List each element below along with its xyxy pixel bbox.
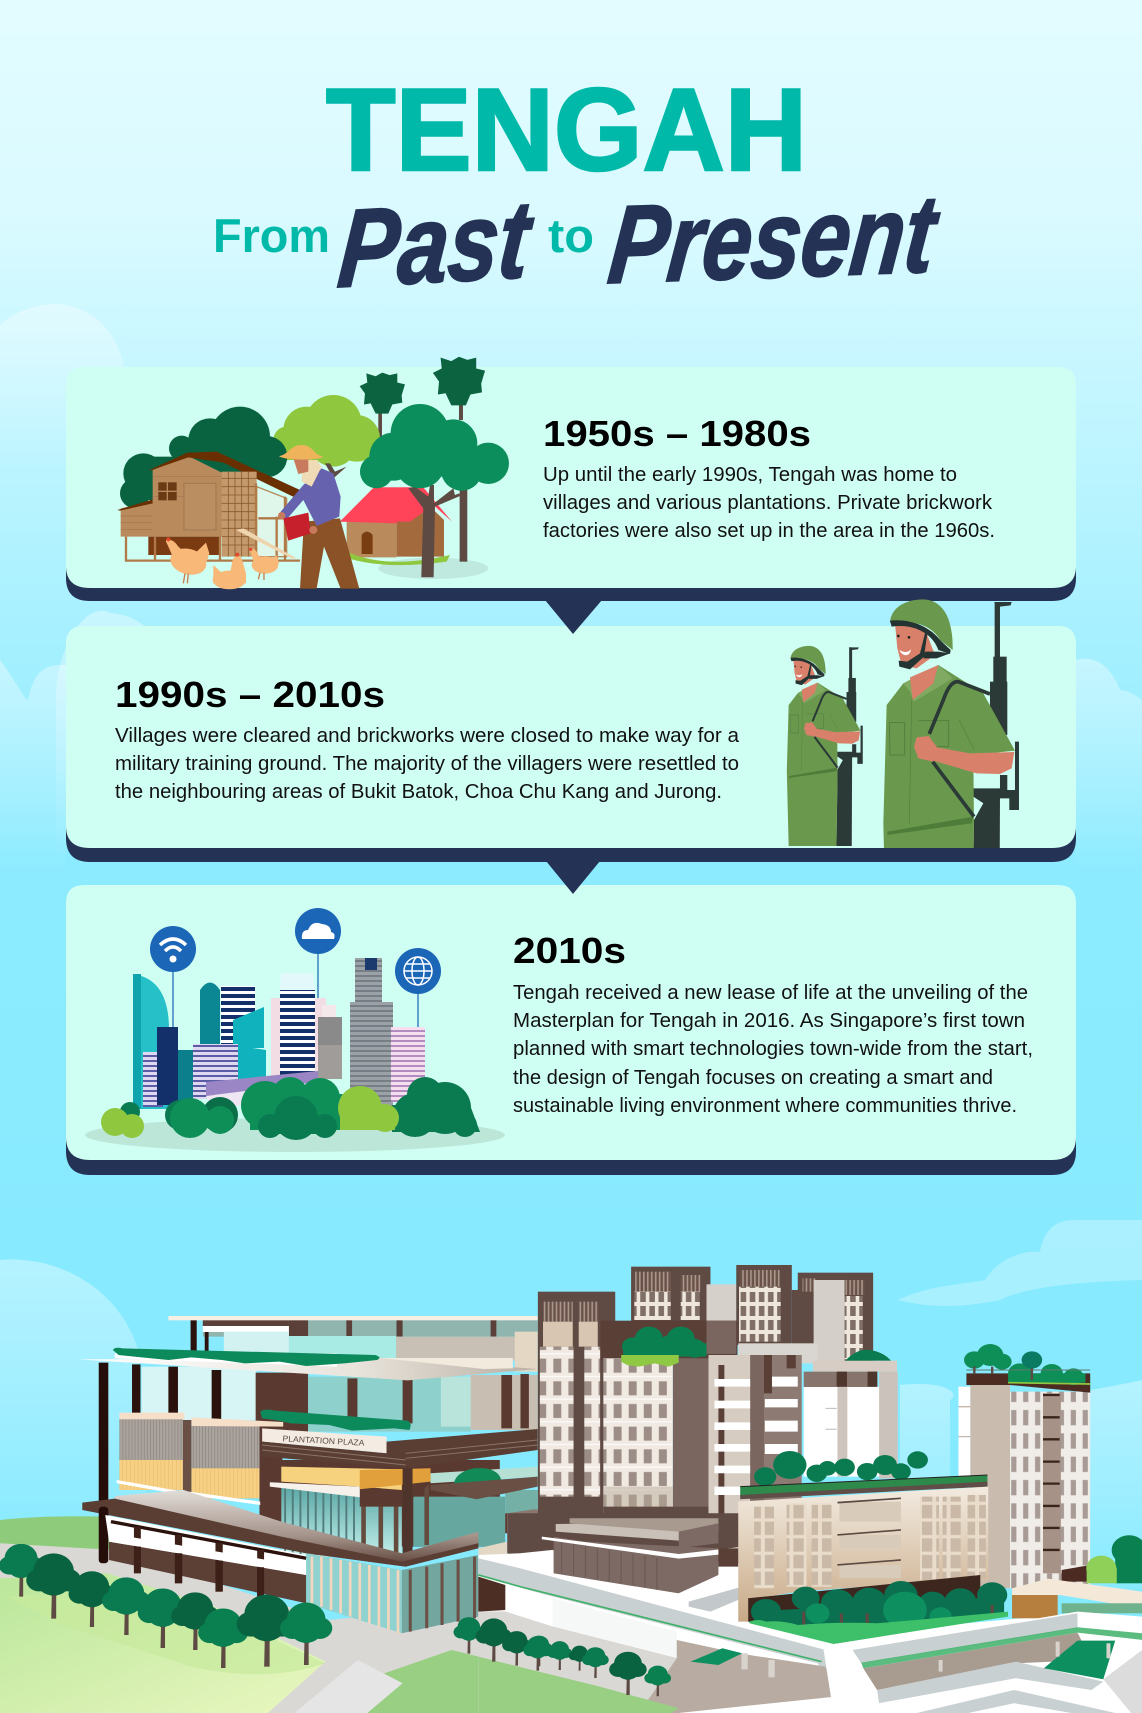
front tree	[360, 404, 509, 577]
title: TENGAH: TENGAH	[326, 64, 807, 195]
icon: cloud pin	[295, 908, 341, 954]
panel 2 card	[66, 626, 1076, 848]
body text 1990s-2010s: Villages were cleared and brickworks were closed to make way for a	[115, 725, 740, 747]
main block	[601, 1321, 737, 1520]
heading 2010s: 2010s	[513, 930, 626, 971]
white plaza and low grey block	[478, 1518, 1142, 1713]
panel 1 card	[66, 367, 1076, 588]
body text 2010s: Tengah received a new lease of life at the unveiling of the	[513, 982, 1028, 1004]
corner podium	[1012, 1535, 1142, 1618]
panel: 2010s	[66, 885, 1076, 1175]
palm trees	[360, 357, 485, 562]
right tower	[958, 1344, 1090, 1588]
subtitle: From Past to Present: Present	[603, 173, 945, 307]
illustration: smart city	[85, 908, 505, 1152]
body text 1990s-2010s	[115, 725, 740, 803]
elevated walkways	[478, 1558, 1142, 1713]
body text 2010s: planned with smart technologies town-wide from the start,	[513, 1038, 1033, 1060]
plantation plaza building	[78, 1316, 556, 1633]
white block	[804, 1350, 898, 1478]
left tree row	[0, 1544, 332, 1668]
tower by plaza	[538, 1292, 615, 1518]
back trees	[120, 395, 380, 508]
back towers	[631, 1265, 873, 1363]
walkway tree row	[526, 1636, 671, 1696]
clouds behind panels	[0, 304, 1142, 880]
icon: globe pin	[395, 948, 441, 994]
illustration: farm with villager and chickens	[117, 357, 509, 589]
subtitle: From Past to Present: to	[548, 209, 594, 262]
hut with red roof	[340, 487, 452, 565]
tower base backing	[508, 1513, 742, 1567]
body text 1950s-1980s: Up until the early 1990s, Tengah was home to	[543, 464, 957, 486]
body text 1950s-1980s: villages and various plantations. Private brickwork	[543, 492, 993, 514]
heading 1990s-2010s: 1990s – 2010s	[115, 674, 385, 715]
panel 3 card	[66, 885, 1076, 1160]
bushes	[101, 1077, 480, 1140]
skyscrapers	[133, 958, 425, 1110]
arrow: from panel 1 to panel 2	[545, 600, 602, 634]
small soldier	[787, 646, 863, 846]
body text 2010s: Masterplan for Tengah in 2016. As Singapore’s first town	[513, 1010, 1025, 1032]
large soldier	[883, 599, 1019, 848]
body text 2010s	[513, 982, 1033, 1117]
arrow: from panel 2 to panel 3	[546, 861, 600, 894]
subtitle: From Past to Present: From	[213, 209, 330, 262]
clouds behind scene	[0, 1220, 1142, 1600]
body text 1990s-2010s: the neighbouring areas of Bukit Batok, Choa Chu Kang and Jurong.	[115, 781, 722, 803]
panel 3 shadow	[66, 1000, 1076, 1175]
panel: 1990s-2010s	[66, 626, 1076, 862]
mid-rise building with roof garden	[738, 1451, 988, 1643]
body text 1990s-2010s: military training ground. The majority of the villagers were resettled to	[115, 753, 739, 775]
panel 2 shadow	[66, 760, 1076, 862]
scene: ground, plaza and left trees	[0, 1316, 600, 1713]
icon: wifi pin	[150, 926, 196, 972]
illustration: soldiers	[786, 599, 1019, 848]
base garden trees	[749, 1581, 1008, 1644]
panel: 1950s-1980s	[66, 367, 1076, 601]
body text 2010s: the design of Tengah focuses on creating a smart and	[513, 1067, 993, 1089]
chicken coop	[117, 452, 300, 561]
heading 1950s-1980s: 1950s – 1980s	[543, 413, 811, 454]
body text 1950s-1980s	[543, 464, 995, 542]
body text 2010s: sustainable living environment where communities thrive.	[513, 1095, 1017, 1117]
chickens	[166, 537, 279, 589]
body text 1950s-1980s: factories were also set up in the area in the 1960s.	[543, 520, 995, 542]
panel 1 shadow	[66, 500, 1076, 601]
scene: residential towers and walkways	[478, 1265, 1142, 1713]
balcony tower	[708, 1355, 802, 1528]
subtitle: From Past to Present: Past	[334, 178, 538, 311]
ground	[0, 1516, 600, 1713]
subtitle: From Past to Present	[213, 173, 945, 311]
plantation plaza building: PLANTATION PLAZA	[282, 1434, 365, 1448]
farmer	[278, 445, 359, 589]
lower tree row	[454, 1617, 552, 1671]
pin stems	[173, 954, 418, 1035]
